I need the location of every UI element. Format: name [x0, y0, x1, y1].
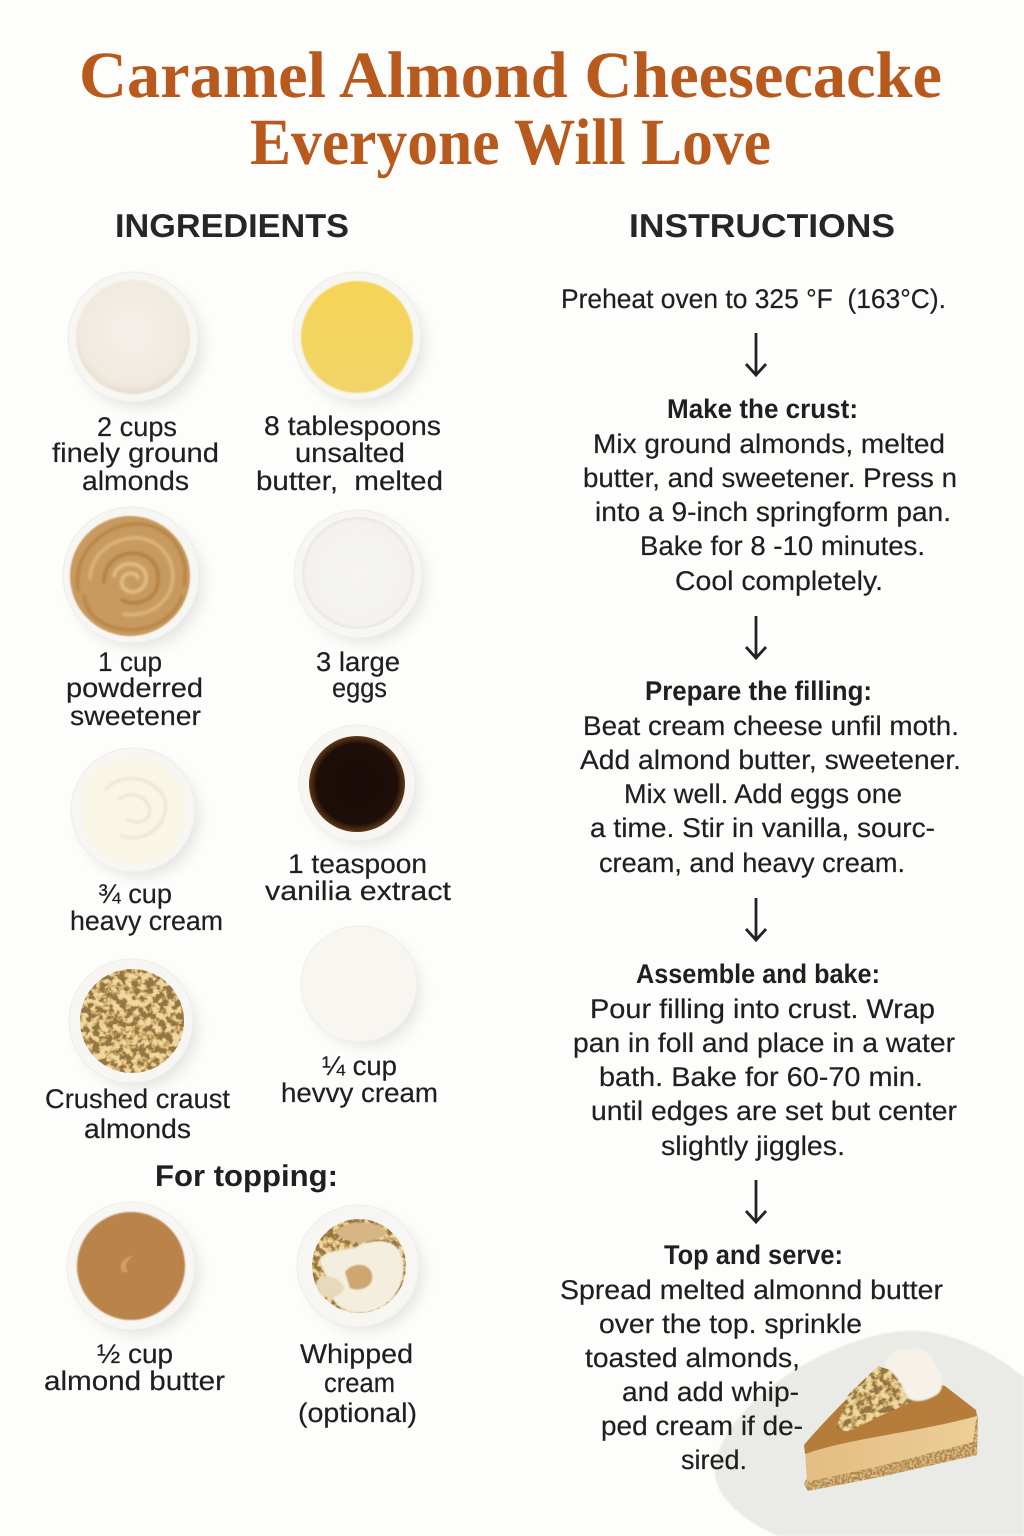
arrow: step 3 to 4: [746, 898, 766, 940]
heading: instructions: INSTRUCTIONS: [629, 207, 895, 244]
step: top and serve: ped cream if de-: [601, 1411, 803, 1441]
title: Everyone Will Love: [250, 106, 771, 179]
arrow: step 1 to 2: [746, 333, 766, 375]
heading: ingredients: INGREDIENTS: [115, 207, 349, 244]
step: top and serve: [560, 1240, 943, 1475]
ingredient: whipped cream: cream: [324, 1368, 395, 1398]
ingredient: eggs: eggs: [332, 673, 387, 703]
step: make the crust: [583, 394, 957, 596]
step: assemble and bake: Pour filling into crust. Wrap: [590, 994, 935, 1024]
ingredient: vanilla extract: vanilia extract: [265, 876, 452, 906]
step: top and serve: and add whip-: [622, 1377, 799, 1407]
ingredient: almond butter: ½ cup: [97, 1339, 173, 1369]
ingredient: powdered sweetener: powderred: [66, 673, 203, 703]
plate: [715, 1331, 1024, 1536]
ingredient: heavy cream: [281, 926, 438, 1108]
cheesecake slice: [804, 1348, 978, 1491]
ingredient: powdered sweetener: [63, 507, 203, 731]
step: assemble and bake: Assemble and bake:: [636, 959, 880, 989]
step: prepare the filling: a time. Stir in vanilla, sourc-: [590, 813, 935, 843]
ingredient: melted butter: unsalted: [295, 438, 405, 468]
ingredient: crushed almonds: [45, 959, 230, 1144]
step: prepare the filling: Mix well. Add eggs one: [624, 779, 902, 809]
step: prepare the filling: [580, 676, 961, 878]
step: top and serve: toasted almonds,: [585, 1343, 800, 1373]
ingredient: melted butter: [256, 272, 443, 496]
title: Caramel Almond Cheesecacke: [79, 39, 942, 112]
step: assemble and bake: slightly jiggles.: [661, 1131, 845, 1161]
subheading: for topping: For topping:: [155, 1160, 338, 1193]
step: prepare the filling: cream, and heavy cream.: [599, 848, 905, 878]
ingredient: almond butter: [44, 1202, 225, 1396]
ingredient: eggs: [294, 510, 425, 703]
ingredient: heavy cream swirl: heavy cream: [70, 906, 223, 936]
step: preheat: Preheat oven to 325 °F (163°C).: [561, 284, 946, 314]
ingredient: ground almonds: almonds: [82, 466, 189, 496]
ingredient: powdered sweetener: 1 cup: [98, 647, 162, 677]
ingredient: heavy cream: ¼ cup: [322, 1051, 397, 1081]
step: top and serve: Top and serve:: [664, 1240, 843, 1270]
step: top and serve: over the top. sprinkle: [599, 1309, 862, 1339]
ingredient: crushed almonds: almonds: [84, 1114, 191, 1144]
step: make the crust: Bake for 8 -10 minutes.: [640, 531, 925, 561]
ingredient: powdered sweetener: sweetener: [70, 701, 201, 731]
ingredient: heavy cream: hevvy cream: [281, 1078, 438, 1108]
step: assemble and bake: until edges are set but center: [591, 1096, 957, 1126]
arrow: step 4 to 5: [746, 1180, 766, 1222]
ingredient: melted butter: 8 tablespoons: [264, 411, 441, 441]
step: top and serve: Spread melted almonnd butter: [560, 1275, 943, 1305]
ingredient: heavy cream swirl: [70, 748, 223, 936]
step: make the crust: butter, and sweetener. Press n: [583, 463, 957, 493]
ingredient: whipped cream: (optional): [298, 1398, 417, 1428]
ingredient: eggs: 3 large: [316, 647, 400, 677]
title: [79, 39, 942, 179]
ingredient: vanilla extract: [265, 725, 452, 906]
ingredient: ground almonds: [52, 272, 219, 496]
ingredient: vanilla extract: 1 teaspoon: [288, 849, 427, 879]
step: top and serve: sired.: [681, 1445, 747, 1475]
arrow: step 2 to 3: [746, 616, 766, 658]
step: make the crust: Make the crust:: [667, 394, 858, 424]
ingredient: heavy cream swirl: ¾ cup: [98, 879, 172, 909]
step: make the crust: Cool completely.: [675, 566, 883, 596]
step: prepare the filling: Beat cream cheese unfil moth.: [583, 711, 959, 741]
ingredient: whipped cream: [297, 1205, 422, 1428]
step: make the crust: Mix ground almonds, melted: [593, 429, 945, 459]
ingredient: melted butter: butter, melted: [256, 466, 443, 496]
ingredient: whipped cream: Whipped: [300, 1339, 413, 1369]
step: prepare the filling: Add almond butter, sweetener.: [580, 745, 961, 775]
ingredient: crushed almonds: Crushed craust: [45, 1084, 230, 1114]
step: assemble and bake: pan in foll and place in a water: [573, 1028, 955, 1058]
ingredient: almond butter: almond butter: [44, 1366, 225, 1396]
ingredient: ground almonds: 2 cups: [97, 412, 177, 442]
step: prepare the filling: Prepare the filling:: [645, 676, 872, 706]
ingredient: ground almonds: finely ground: [52, 438, 219, 468]
step: assemble and bake: [573, 959, 957, 1161]
step: make the crust: into a 9-inch springform pan.: [595, 497, 951, 527]
step: assemble and bake: bath. Bake for 60-70 min.: [599, 1062, 923, 1092]
